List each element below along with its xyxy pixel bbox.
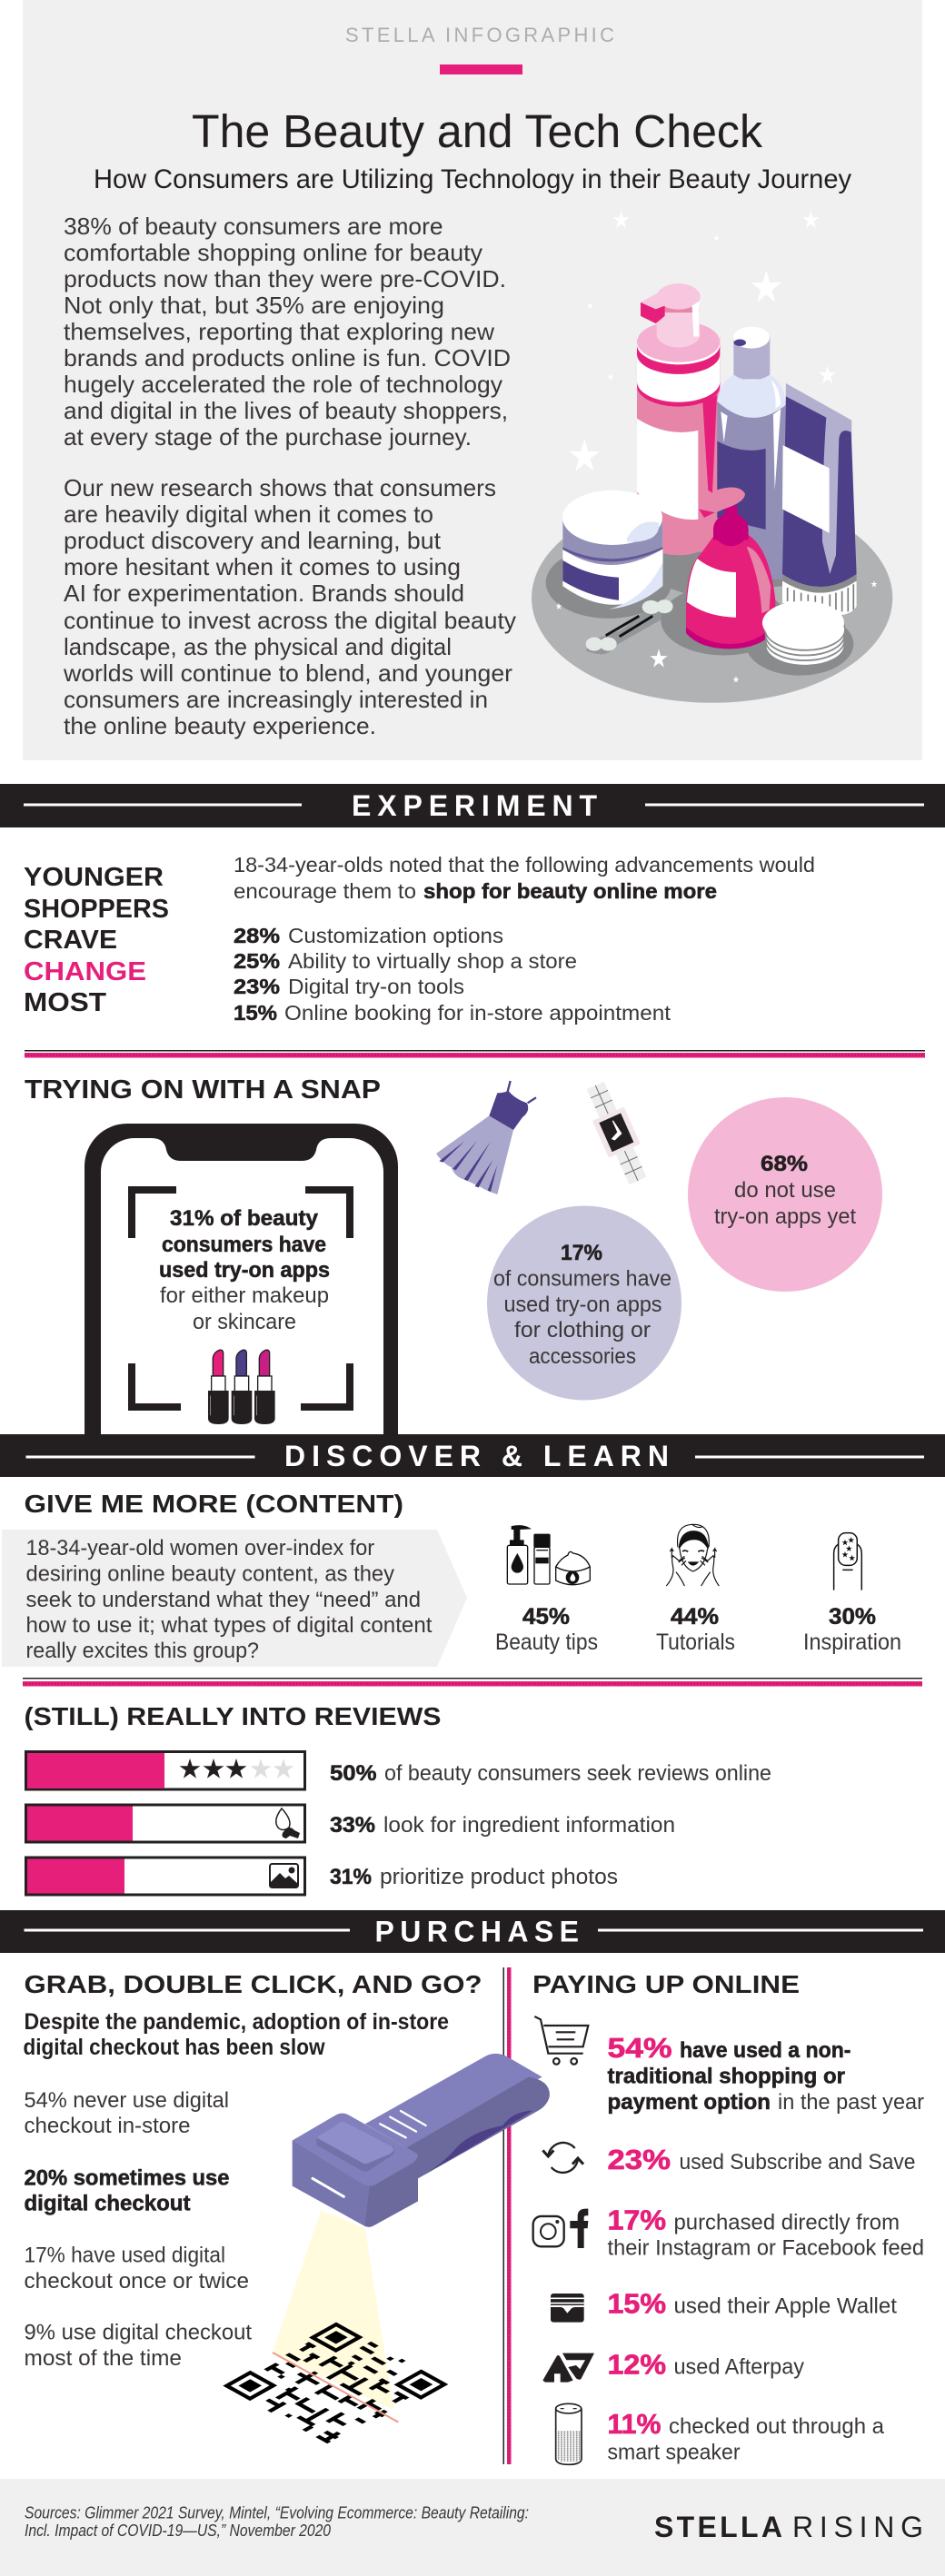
callout: 17 percent: of consumers have: [493, 1266, 671, 1292]
callout arrow: content: 18-34-year-old women over-index for: [25, 1536, 374, 1560]
text block: checkout adoption: checkout once or twice: [24, 2269, 249, 2294]
icon: dress: [436, 1081, 536, 1194]
text block: advancements list: [234, 853, 815, 1025]
phone text: consumers have: [162, 1233, 326, 1257]
text block: checkout adoption: 9% use digital checkout: [24, 2320, 252, 2345]
scan brackets: [128, 1186, 353, 1411]
callout: 17 percent: 17%: [561, 1241, 602, 1265]
row: smart speaker: 11%: [607, 2408, 662, 2440]
intro paragraph one: Not only that, but 35% are enjoying: [64, 292, 444, 319]
text block: checkout adoption: 54% never use digital: [24, 2088, 229, 2113]
heading: younger shoppers crave change most: CHANGE: [24, 957, 146, 986]
intro paragraph two: AI for experimentation. Brands should: [64, 580, 464, 607]
stat: inspiration: Inspiration: [803, 1630, 901, 1655]
text block: advancements list: 28%: [234, 924, 280, 947]
phone illustration: [85, 1124, 398, 1434]
intro paragraph one: 38% of beauty consumers are more: [64, 213, 443, 240]
bar: photos 31 percent: prioritize product photos: [380, 1865, 618, 1889]
heading: give me more content: GIVE ME MORE (CONTENT): [24, 1490, 403, 1518]
bar: photos 31 percent: 31%: [330, 1865, 372, 1889]
intro paragraph two: continue to invest across the digital beauty: [64, 607, 516, 634]
row: subscribe and save: 23%: [607, 2144, 671, 2175]
row: non-traditional shopping: payment option: [607, 2090, 771, 2115]
stat: beauty tips: Beauty tips: [495, 1630, 598, 1655]
callout arrow: content: really excites this group?: [25, 1639, 259, 1663]
intro paragraph two: [63, 474, 516, 739]
callout arrow: content: seek to understand what they “need” and: [25, 1588, 421, 1612]
phone text: or skincare: [193, 1310, 296, 1334]
stat: beauty tips: [495, 1526, 598, 1655]
text block: advancements list: Digital try-on tools: [288, 975, 464, 998]
title: The Beauty and Tech Check: [192, 105, 762, 157]
intro paragraph one: brands and products online is fun. COVID: [64, 344, 511, 372]
heading: younger shoppers crave change most: CRAVE: [24, 926, 117, 955]
stat: tutorials: Tutorials: [656, 1630, 735, 1655]
text block: checkout adoption: 20% sometimes use: [24, 2165, 229, 2191]
icon: instagram and facebook: [533, 2209, 588, 2248]
text block: advancements list: Ability to virtually shop a store: [288, 949, 577, 973]
icon: wallet: [551, 2294, 584, 2323]
intro paragraph two: landscape, as the physical and digital: [64, 633, 452, 660]
row: smart speaker: smart speaker: [607, 2440, 740, 2465]
phone text: for either makeup: [160, 1283, 329, 1308]
tall pump bottle: [637, 283, 720, 555]
bar: ingredients 33 percent: [25, 1805, 675, 1842]
row: smart speaker: checked out through a: [669, 2414, 885, 2439]
row: afterpay: [542, 2349, 804, 2383]
section bar: experiment: EXPERIMENT: [352, 789, 597, 822]
callout: 68 percent: try-on apps yet: [714, 1204, 856, 1229]
text block: checkout adoption: digital checkout: [24, 2191, 191, 2216]
text block: checkout adoption: checkout in-store: [24, 2114, 190, 2138]
section bar: purchase: [0, 1910, 945, 1953]
text block: advancements list: Customization options: [288, 924, 503, 947]
icon: refresh arrows: [542, 2143, 583, 2173]
row: non-traditional shopping: have used a non-: [680, 2038, 851, 2063]
logo: Stella Rising: STELLA: [654, 2511, 782, 2543]
grey bottle: [717, 327, 786, 580]
bar: photos 31 percent: [25, 1858, 618, 1895]
intro paragraph one: comfortable shopping online for beauty: [64, 239, 482, 266]
callout: 17 percent: for clothing or: [514, 1318, 651, 1342]
intro paragraph one: themselves, reporting that exploring new: [64, 318, 494, 345]
icon: droplet and leaf: [276, 1808, 300, 1838]
scan beam: [273, 2210, 393, 2410]
row: non-traditional shopping: in the past year: [778, 2090, 924, 2115]
text block: checkout adoption: [24, 2009, 449, 2371]
row: apple wallet: [551, 2287, 897, 2323]
intro paragraph two: product discovery and learning, but: [64, 527, 442, 554]
callout: 17 percent: accessories: [529, 1344, 636, 1369]
phone text: [159, 1206, 330, 1334]
row: subscribe and save: [542, 2143, 916, 2175]
text block: advancements list: 23%: [234, 975, 280, 998]
text block: checkout adoption: most of the time: [24, 2346, 182, 2371]
intro paragraph two: are heavily digital when it comes to: [64, 500, 433, 528]
icon: afterpay logo: [542, 2353, 594, 2383]
row: apple wallet: 15%: [607, 2287, 666, 2320]
text block: checkout adoption: Despite the pandemic, adoption of in-store: [24, 2009, 449, 2035]
stat: inspiration: 30%: [829, 1604, 876, 1630]
tube: [782, 383, 857, 615]
cotton swabs: [586, 599, 673, 654]
heading: trying on with a snap: TRYING ON WITH A SNAP: [25, 1075, 381, 1105]
panel: footer: [0, 2479, 945, 2576]
soap dispenser: [686, 487, 775, 649]
intro paragraph two: more hesitant when it comes to using: [64, 553, 461, 580]
row: smart speaker: [556, 2403, 885, 2465]
heading: paying up online: PAYING UP ONLINE: [532, 1970, 800, 1998]
icon: face with hands: [666, 1524, 719, 1586]
section bar: discover and learn: [0, 1434, 945, 1477]
callout: 68 percent: 68%: [761, 1152, 808, 1176]
icon: picture: [270, 1864, 298, 1887]
logo: Stella Rising: [654, 2511, 923, 2543]
row: non-traditional shopping: traditional shopping or: [607, 2064, 845, 2089]
bar: reviews 50 percent: of beauty consumers seek reviews online: [384, 1761, 771, 1786]
row: non-traditional shopping: [534, 2016, 924, 2115]
callout: 68 percent: do not use: [734, 1178, 836, 1203]
stars: [556, 211, 877, 683]
intro paragraph one: and digital in the lives of beauty shoppers,: [64, 397, 508, 424]
sources: Sources: Glimmer 2021 Survey, Mintel, “Evolving Ecommerce: Beauty Retailing:: [25, 2503, 529, 2522]
row: instagram or facebook: their Instagram or Facebook feed: [607, 2236, 924, 2260]
subtitle: How Consumers are Utilizing Technology in their Beauty Journey: [94, 164, 851, 194]
stat: beauty tips: 45%: [522, 1604, 570, 1630]
heading: grab double click and go: GRAB, DOUBLE CLICK, AND GO?: [24, 1970, 482, 1998]
heading: younger shoppers crave change most: YOUNGER: [24, 863, 164, 892]
stat: tutorials: 44%: [671, 1604, 719, 1630]
bar: reviews 50 percent: 50%: [330, 1761, 376, 1786]
intro paragraph two: consumers are increasingly interested in: [64, 686, 488, 713]
row: apple wallet: used their Apple Wallet: [674, 2294, 897, 2318]
section bar: discover and learn: DISCOVER & LEARN: [284, 1440, 669, 1472]
callout: 68 percent: [688, 1097, 882, 1292]
intro paragraph one: at every stage of the purchase journey.: [64, 423, 472, 451]
heading: younger shoppers crave change most: MOST: [24, 988, 106, 1017]
intro paragraph two: Our new research shows that consumers: [64, 474, 496, 501]
icon: lipsticks: [209, 1350, 274, 1423]
heading: younger shoppers crave change most: SHOPPERS: [24, 895, 169, 924]
icon: star rating: [180, 1759, 293, 1778]
eyebrow label: STELLA INFOGRAPHIC: [345, 24, 614, 46]
intro paragraph two: the online beauty experience.: [64, 712, 376, 739]
illustration: QR scanner: [223, 2054, 550, 2448]
callout: 17 percent: [487, 1206, 681, 1401]
panel: footer: Incl. Impact of COVID-19—US,” November 2020: [25, 2522, 331, 2540]
icon: nail: [834, 1533, 861, 1590]
text block: advancements list: 18-34-year-olds noted that the following advancements would: [234, 853, 815, 877]
text block: advancements list: encourage them to: [234, 879, 416, 903]
callout: 17 percent: used try-on apps: [503, 1293, 662, 1317]
callout arrow: content: [2, 1530, 467, 1667]
bar: ingredients 33 percent: look for ingredient information: [383, 1813, 675, 1838]
tray: [532, 493, 892, 703]
intro paragraph one: products now than they were pre-COVID.: [64, 265, 506, 292]
intro paragraph two: worlds will continue to blend, and younger: [63, 659, 512, 687]
row: instagram or facebook: purchased directly from: [674, 2211, 900, 2234]
illustration: beauty products on a tray: [532, 211, 892, 703]
phone text: 31% of beauty: [170, 1206, 319, 1231]
section bar: experiment: [0, 784, 945, 827]
pink accent bar: [440, 64, 522, 74]
icon: shopping cart: [534, 2016, 588, 2065]
row: afterpay: 12%: [607, 2349, 666, 2380]
scanner handle: [365, 2054, 542, 2148]
heading: younger shoppers crave change most: [24, 863, 169, 1017]
cotton pads: [762, 601, 845, 666]
QR code: [223, 2323, 448, 2448]
cream jar: [562, 490, 662, 609]
scanner head: [293, 2114, 418, 2227]
bar: ingredients 33 percent: 33%: [330, 1813, 375, 1838]
row: instagram or facebook: 17%: [607, 2204, 666, 2236]
row: subscribe and save: used Subscribe and Save: [680, 2150, 916, 2175]
callout arrow: content: how to use it; what types of digital content: [25, 1613, 433, 1638]
intro paragraph one: hugely accelerated the role of technology: [64, 371, 502, 398]
row: non-traditional shopping: 54%: [607, 2032, 672, 2064]
heading: still really into reviews: (STILL) REALLY INTO REVIEWS: [24, 1702, 442, 1730]
stat: tutorials: [656, 1524, 735, 1655]
bar: reviews 50 percent: [25, 1751, 771, 1789]
text block: advancements list: Online booking for in-store appointment: [284, 1001, 671, 1025]
panel: intro: [23, 0, 922, 760]
text block: checkout adoption: digital checkout has been slow: [24, 2035, 325, 2060]
text block: advancements list: 25%: [234, 949, 280, 973]
text block: advancements list: shop for beauty online more: [423, 879, 717, 903]
text block: advancements list: 15%: [234, 1001, 277, 1025]
stat: inspiration: [803, 1533, 901, 1655]
icon: watch: [580, 1078, 653, 1188]
icon: bottles: [507, 1526, 590, 1585]
scan line: [273, 2353, 398, 2422]
row: instagram or facebook: [533, 2204, 924, 2260]
logo: Stella Rising: RISING: [792, 2511, 923, 2543]
callout arrow: content: desiring online beauty content, as they: [25, 1562, 394, 1586]
text block: checkout adoption: 17% have used digital: [24, 2244, 225, 2267]
intro paragraph one: [64, 213, 511, 451]
icon: smart speaker: [556, 2403, 582, 2464]
row: afterpay: used Afterpay: [674, 2354, 804, 2380]
section bar: purchase: PURCHASE: [374, 1915, 579, 1947]
phone text: used try-on apps: [159, 1258, 330, 1283]
